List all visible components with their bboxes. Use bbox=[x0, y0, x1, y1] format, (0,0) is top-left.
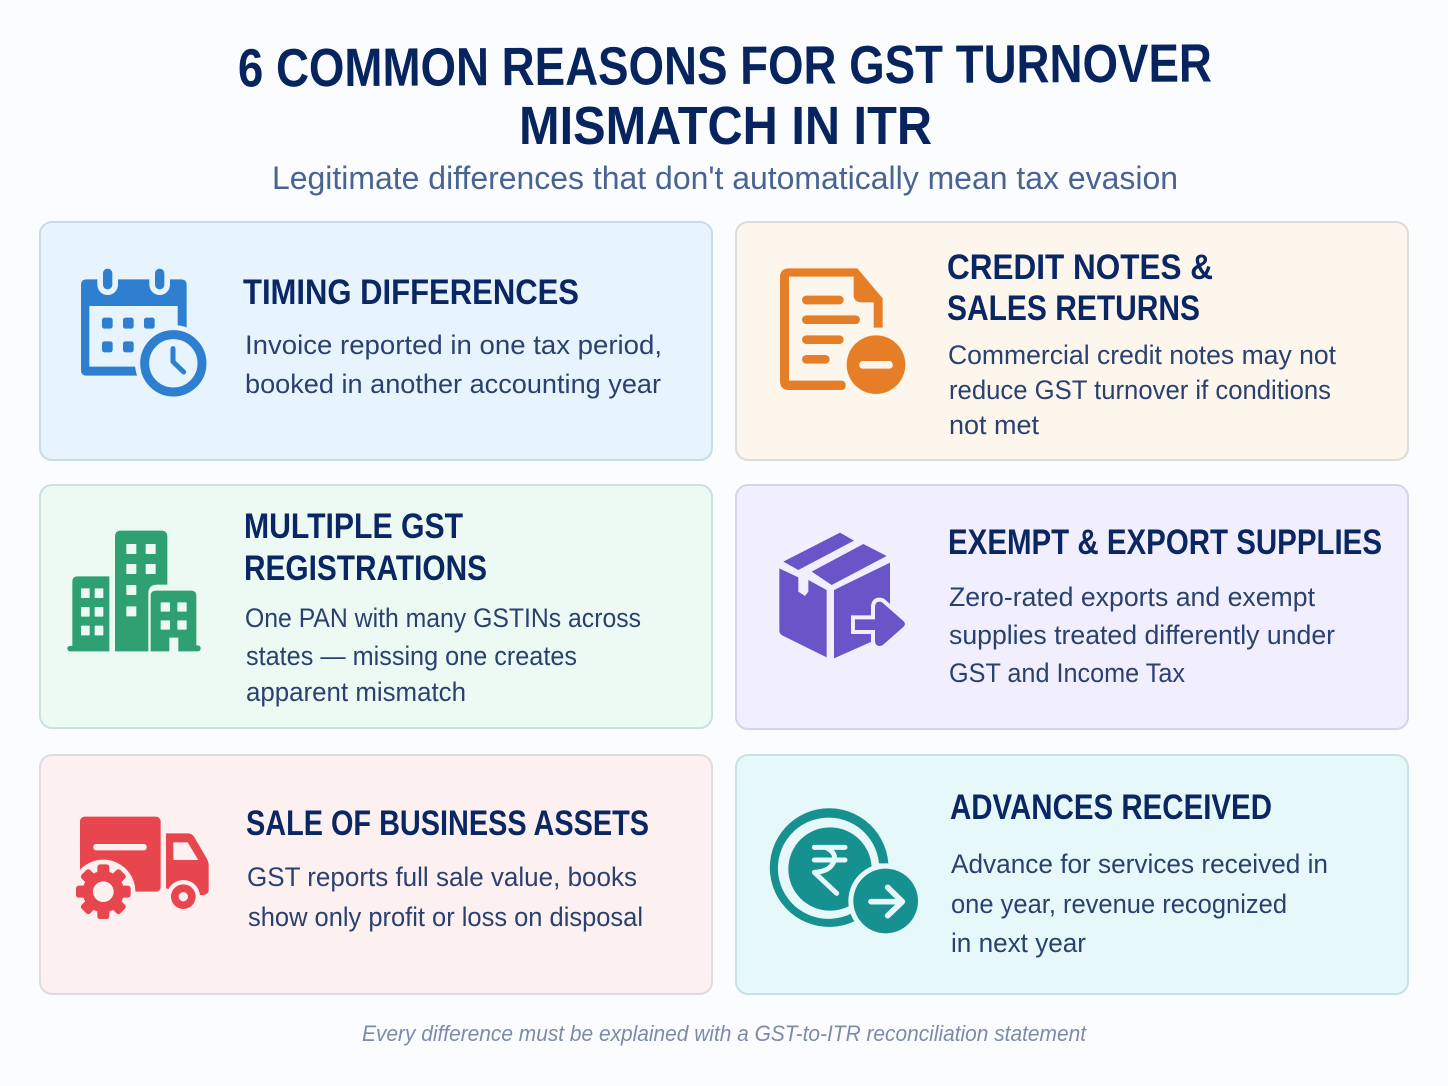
icon: calendar with clock bbox=[81, 265, 212, 402]
heading: multiple GST registrations: REGISTRATIONS bbox=[244, 549, 487, 588]
description: exempt and export supplies bbox=[949, 582, 1335, 688]
description: sale of business assets bbox=[247, 862, 643, 932]
description: advances received: one year, revenue recognized bbox=[951, 889, 1287, 919]
description: exempt and export supplies: Zero-rated exports and exempt bbox=[949, 582, 1315, 612]
description: exempt and export supplies: GST and Income Tax bbox=[949, 658, 1185, 688]
description: multiple GST registrations: One PAN with many GSTINs across bbox=[245, 603, 641, 633]
panel: multiple GST registrations bbox=[40, 485, 712, 728]
description: multiple GST registrations bbox=[245, 603, 641, 707]
title: 6 COMMON REASONS FOR GST TURNOVER bbox=[238, 33, 1212, 99]
heading: multiple GST registrations bbox=[244, 507, 487, 588]
icon: rupee coin with arrow bbox=[770, 808, 923, 938]
panel: advances received bbox=[736, 755, 1408, 994]
description: timing differences: booked in another accounting year bbox=[245, 369, 661, 399]
title: MISMATCH IN ITR bbox=[519, 96, 932, 156]
panel: credit notes and sales returns bbox=[736, 222, 1408, 460]
description: advances received bbox=[951, 849, 1328, 958]
description: sale of business assets: show only profit or loss on disposal bbox=[248, 902, 643, 932]
heading: exempt and export supplies: EXEMPT & EXPORT SUPPLIES bbox=[948, 523, 1382, 562]
heading: sale of business assets: SALE OF BUSINESS ASSETS bbox=[246, 804, 649, 843]
description: timing differences: Invoice reported in one tax period, bbox=[245, 330, 662, 360]
panel: sale of business assets bbox=[40, 755, 712, 994]
description: credit notes and sales returns: not met bbox=[949, 410, 1039, 440]
description: advances received: Advance for services received in bbox=[951, 849, 1328, 879]
description: exempt and export supplies: supplies treated differently under bbox=[949, 620, 1335, 650]
icon: truck with gear bbox=[71, 817, 209, 924]
description: credit notes and sales returns: reduce GST turnover if conditions bbox=[949, 375, 1331, 405]
description: sale of business assets: GST reports full sale value, books bbox=[247, 862, 637, 892]
icon: office buildings bbox=[67, 531, 201, 651]
icon: document with minus bbox=[780, 268, 905, 394]
panel: timing differences bbox=[40, 222, 712, 460]
heading: advances received: ADVANCES RECEIVED bbox=[950, 788, 1272, 827]
panel: exempt and export supplies bbox=[736, 485, 1408, 729]
description: multiple GST registrations: apparent mismatch bbox=[246, 677, 466, 707]
description: multiple GST registrations: states — missing one creates bbox=[246, 641, 577, 671]
heading: multiple GST registrations: MULTIPLE GST bbox=[244, 507, 463, 546]
footer note: Every difference must be explained with a GST-to-ITR reconciliation statement bbox=[362, 1021, 1087, 1046]
icon: parcel with export arrow bbox=[779, 533, 905, 658]
title bbox=[238, 33, 1212, 156]
description: timing differences bbox=[245, 330, 662, 399]
description: credit notes and sales returns bbox=[948, 340, 1336, 440]
subtitle: Legitimate differences that don't automatically mean tax evasion bbox=[272, 160, 1178, 196]
heading: credit notes and sales returns: CREDIT NOTES & bbox=[947, 248, 1213, 287]
heading: timing differences: TIMING DIFFERENCES bbox=[243, 273, 579, 312]
description: advances received: in next year bbox=[951, 928, 1086, 958]
heading: credit notes and sales returns: SALES RETURNS bbox=[947, 289, 1200, 328]
description: credit notes and sales returns: Commercial credit notes may not bbox=[948, 340, 1336, 370]
heading: credit notes and sales returns bbox=[947, 248, 1213, 328]
